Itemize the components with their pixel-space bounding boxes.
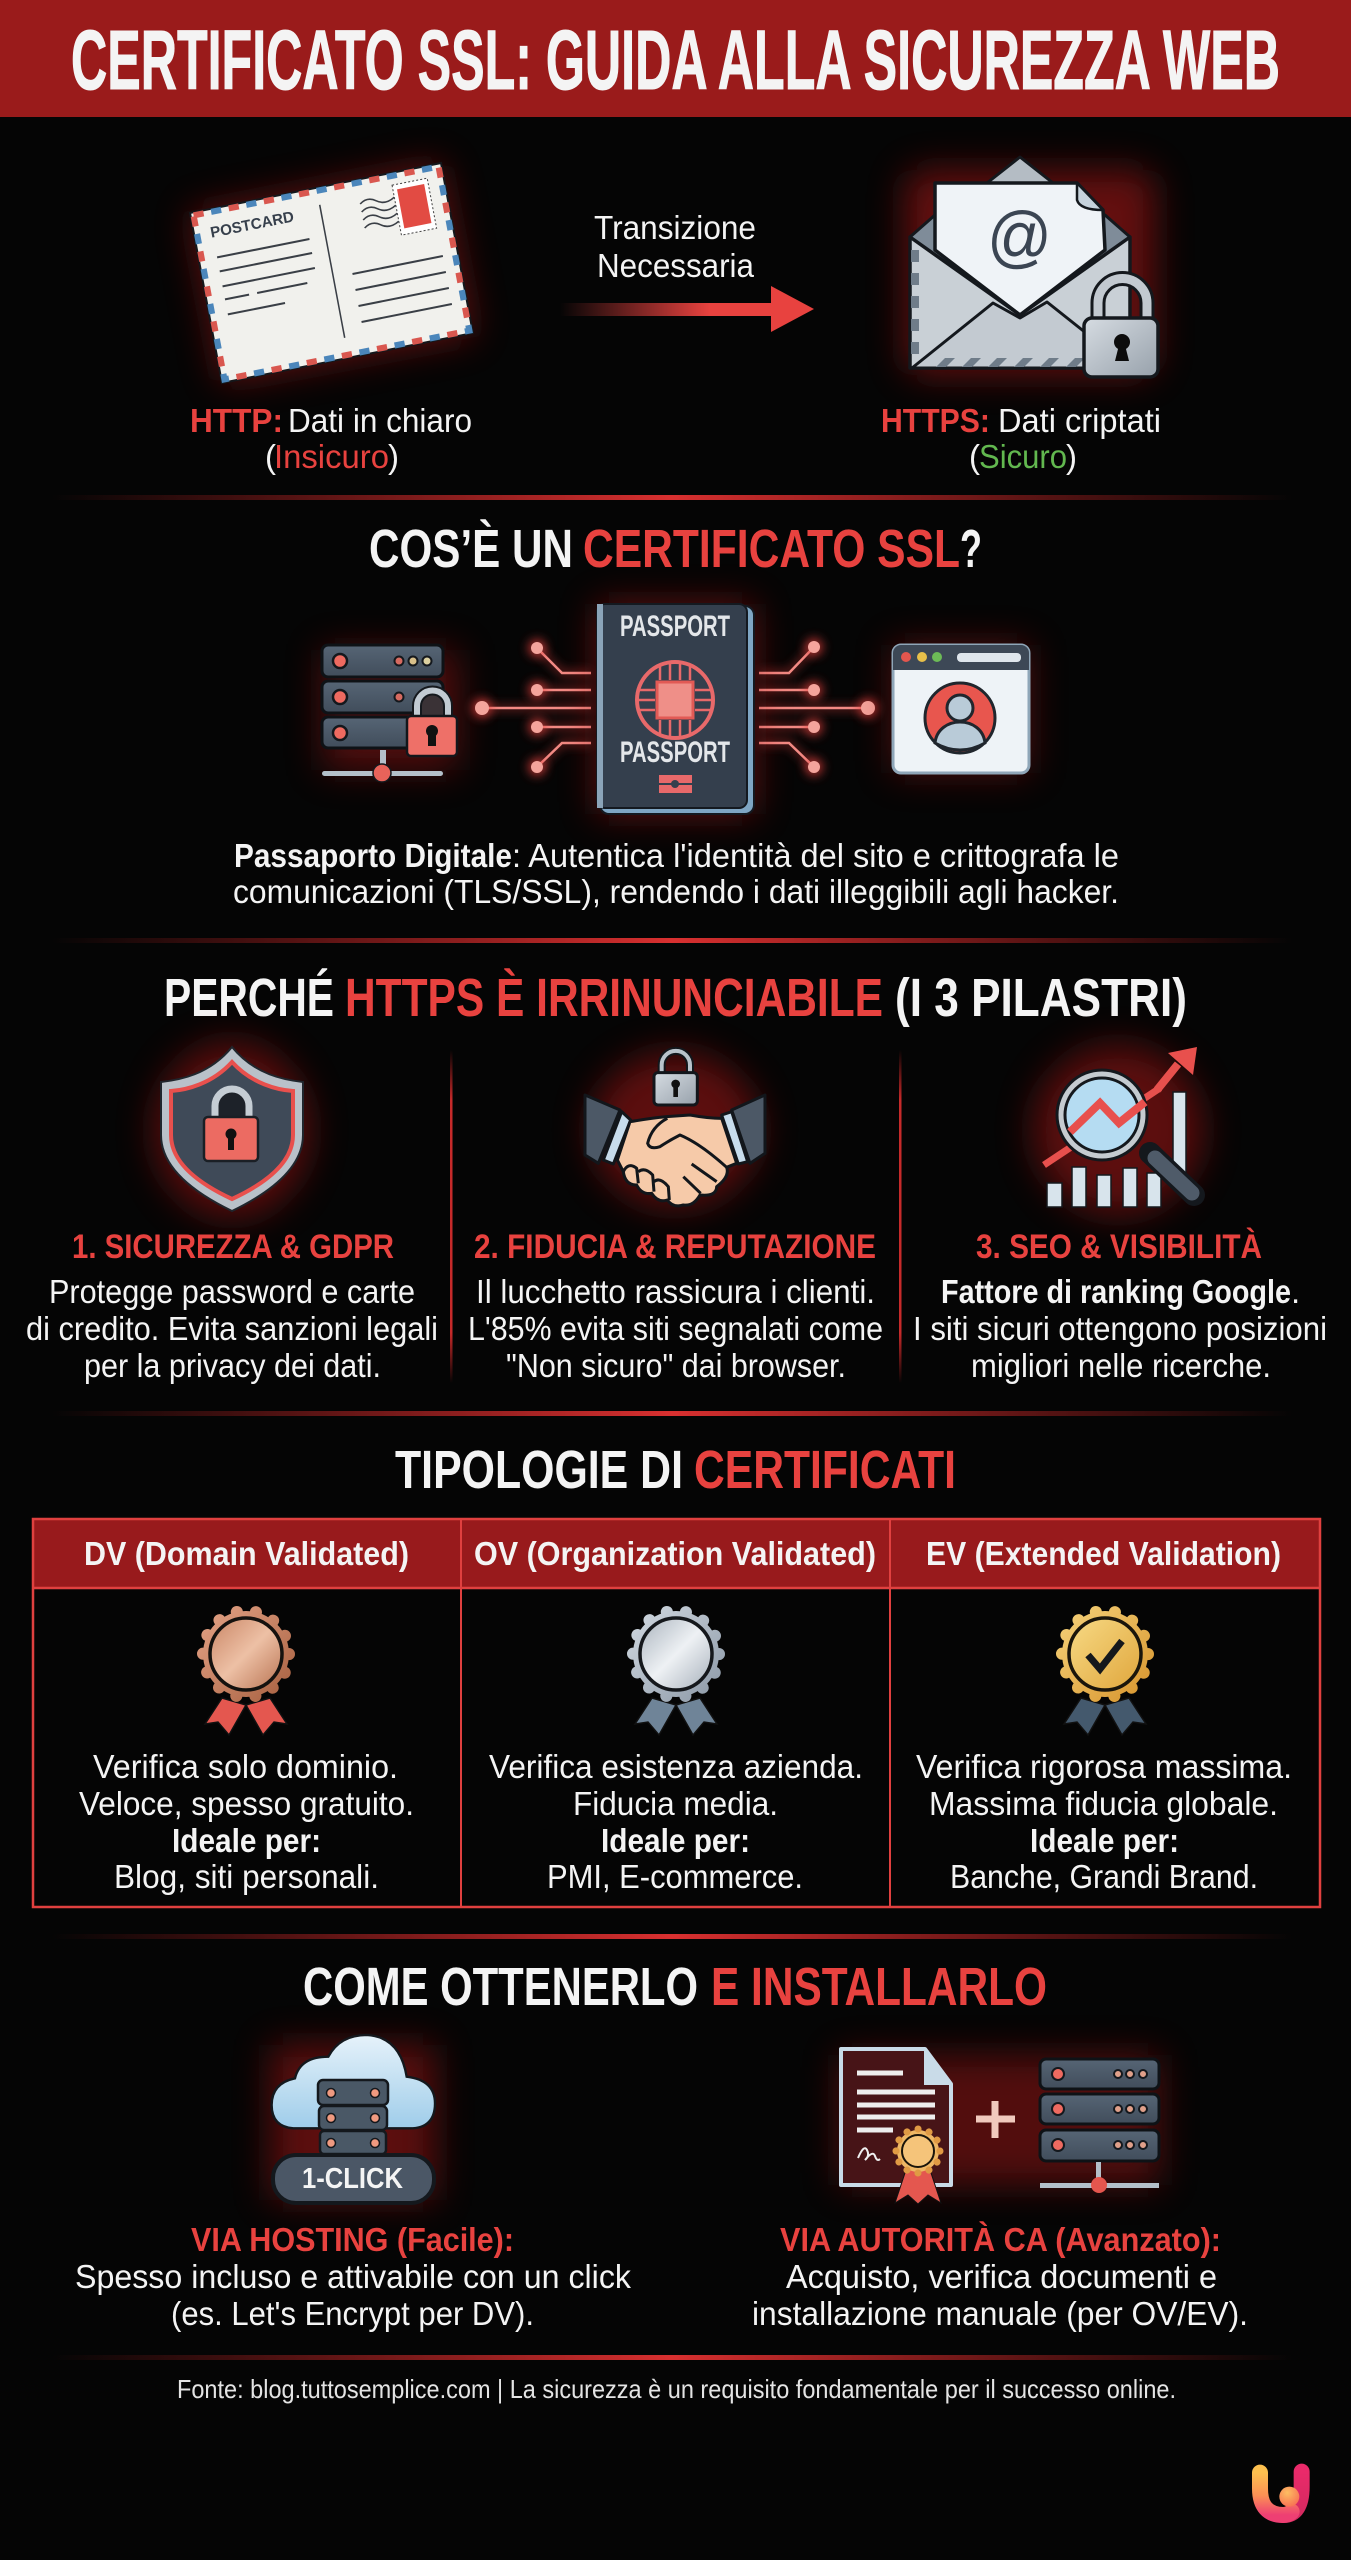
icon: cloud hosting one click: 1-CLICK	[302, 2163, 403, 2195]
icon: digital passport	[597, 604, 754, 814]
text: via CA: VIA AUTORITÀ CA (Avanzato):	[780, 2221, 1221, 2258]
heading: pillars: (I 3 PILASTRI)	[895, 968, 1187, 1028]
panel: how to obtain	[75, 1957, 1248, 2332]
text: digital passport description	[233, 837, 1119, 910]
icon: circuit traces	[472, 638, 878, 776]
column: EV: Verifica rigorosa massima.	[916, 1748, 1292, 1785]
text: digital passport description: : Autentica l'identità del sito e crittografa le	[512, 837, 1119, 874]
text: SEO: migliori nelle ricerche.	[971, 1347, 1271, 1384]
heading: certificate types: CERTIFICATI	[694, 1440, 956, 1500]
icon: digital passport: PASSPORT	[620, 610, 730, 643]
text: via CA: Acquisto, verifica documenti e	[786, 2258, 1217, 2295]
icon: shield	[154, 1042, 310, 1218]
column: DV	[79, 1535, 414, 1895]
heading: what is: COS’È UN	[369, 519, 573, 579]
label: HTTPS: HTTPS:	[881, 402, 990, 439]
icon: bronze medal	[203, 1611, 289, 1735]
label: HTTP: (	[265, 438, 276, 475]
heading: certificate types	[395, 1440, 956, 1500]
icon: gold medal	[1062, 1611, 1148, 1735]
text: via CA: installazione manuale (per OV/EV).	[752, 2295, 1248, 2332]
column: EV: EV (Extended Validation)	[926, 1535, 1281, 1572]
column: OV	[474, 1535, 876, 1895]
icon: certificate plus server	[840, 2049, 1160, 2204]
label: HTTPS: (	[969, 438, 980, 475]
column: OV: Verifica esistenza azienda.	[489, 1748, 863, 1785]
pillar 3: SEO	[913, 1045, 1327, 1384]
text: trust: "Non sicuro" dai browser.	[506, 1347, 846, 1384]
icon: magnifier chart	[1033, 1045, 1203, 1215]
text: trust	[468, 1273, 883, 1384]
text: digital passport description: comunicazioni (TLS/SSL), rendendo i dati illeggibili agli hacker.	[233, 873, 1119, 910]
heading: pillars	[164, 968, 1187, 1028]
icon: postcard: POSTCARD	[209, 208, 295, 242]
heading: pillars: HTTPS È IRRINUNCIABILE	[345, 968, 883, 1028]
column: EV: Banche, Grandi Brand.	[950, 1858, 1258, 1895]
heading: trust: 2. FIDUCIA & REPUTAZIONE	[474, 1228, 876, 1266]
heading: how to obtain	[303, 1957, 1047, 2017]
column: EV: Ideale per:	[1030, 1822, 1179, 1859]
heading: how to obtain: COME OTTENERLO	[303, 1957, 698, 2017]
panel: three pillars	[26, 968, 1327, 1384]
label: HTTP: HTTP:	[190, 402, 283, 439]
text: SEO	[913, 1273, 1327, 1384]
column: EV	[916, 1535, 1292, 1895]
label: HTTPS: Dati criptati	[998, 402, 1161, 439]
column: DV: Ideale per:	[172, 1822, 321, 1859]
label: transition: Transizione	[594, 209, 756, 246]
text: SEO: Fattore di ranking Google	[941, 1273, 1291, 1310]
text: security: Protegge password e carte	[49, 1273, 415, 1310]
heading: certificate types: TIPOLOGIE DI	[395, 1440, 683, 1500]
label: transition	[594, 209, 756, 284]
icon: secure envelope: @	[987, 198, 1052, 275]
icon: browser profile	[893, 645, 1029, 773]
label: HTTP: )	[388, 438, 399, 475]
pillar 1: security	[26, 1042, 438, 1384]
text: via CA	[752, 2221, 1248, 2332]
text: trust: Il lucchetto rassicura i clienti.	[476, 1273, 875, 1310]
label: HTTPS	[881, 402, 1161, 475]
panel: HTTP to HTTPS transition	[190, 157, 1161, 475]
icon: secure envelope	[905, 157, 1158, 377]
text: security	[26, 1273, 438, 1384]
heading: how to obtain: E INSTALLARLO	[711, 1957, 1047, 2017]
column: DV: Blog, siti personali.	[114, 1858, 379, 1895]
column: DV: Veloce, spesso gratuito.	[79, 1785, 414, 1822]
panel: what is an SSL certificate	[233, 519, 1119, 910]
text: SEO: I siti sicuri ottengono posizioni	[913, 1310, 1327, 1347]
heading: what is	[369, 519, 982, 579]
label: HTTPS: )	[1066, 438, 1077, 475]
text: trust: L'85% evita siti segnalati come	[468, 1310, 883, 1347]
text: via hosting: VIA HOSTING (Facile):	[191, 2221, 514, 2258]
heading: security: 1. SICUREZZA & GDPR	[72, 1228, 394, 1266]
label: HTTP	[190, 402, 472, 475]
heading: pillars: PERCHÉ	[164, 968, 334, 1028]
text: digital passport description: Passaporto Digitale	[234, 837, 512, 874]
column: OV: OV (Organization Validated)	[474, 1535, 876, 1572]
column: OV: PMI, E-commerce.	[547, 1858, 803, 1895]
column: OV: Ideale per:	[601, 1822, 750, 1859]
column: OV: Fiducia media.	[573, 1785, 778, 1822]
icon: postcard	[190, 163, 474, 383]
table: certificate comparison	[33, 1519, 1320, 1907]
heading: what is: CERTIFICATO SSL	[583, 519, 960, 579]
footer: source: Fonte: blog.tuttosemplice.com | La sicurezza è un requisito fondamentale per il successo online.	[177, 2374, 1176, 2404]
label: HTTPS: Sicuro	[979, 438, 1067, 475]
icon: locked server	[322, 645, 458, 782]
icon: logo	[1260, 2472, 1302, 2515]
heading: what is: ?	[960, 519, 982, 579]
text: via hosting: Spesso incluso e attivabile con un click	[75, 2258, 631, 2295]
panel: certificate types	[33, 1440, 1320, 1907]
icon: handshake	[585, 1051, 765, 1208]
column: DV: Verifica solo dominio.	[93, 1748, 398, 1785]
icon: silver medal	[633, 1611, 719, 1735]
text: via hosting: (es. Let's Encrypt per DV).	[171, 2295, 534, 2332]
label: HTTP: Insicuro	[274, 438, 389, 475]
icon: digital passport: PASSPORT	[620, 736, 730, 769]
column: DV: DV (Domain Validated)	[84, 1535, 409, 1572]
text: via hosting	[75, 2221, 631, 2332]
pillar 2: trust	[468, 1051, 883, 1384]
label: HTTP: Dati in chiaro	[288, 402, 472, 439]
label: transition: Necessaria	[597, 247, 755, 284]
icon: cloud hosting one click	[271, 2035, 435, 2203]
text: SEO: .	[1291, 1273, 1300, 1310]
heading: SEO: 3. SEO & VISIBILITÀ	[976, 1228, 1262, 1266]
text: security: di credito. Evita sanzioni legali	[26, 1310, 438, 1347]
arrow: transition	[560, 286, 814, 332]
column: EV: Massima fiducia globale.	[929, 1785, 1278, 1822]
text: security: per la privacy dei dati.	[84, 1347, 381, 1384]
